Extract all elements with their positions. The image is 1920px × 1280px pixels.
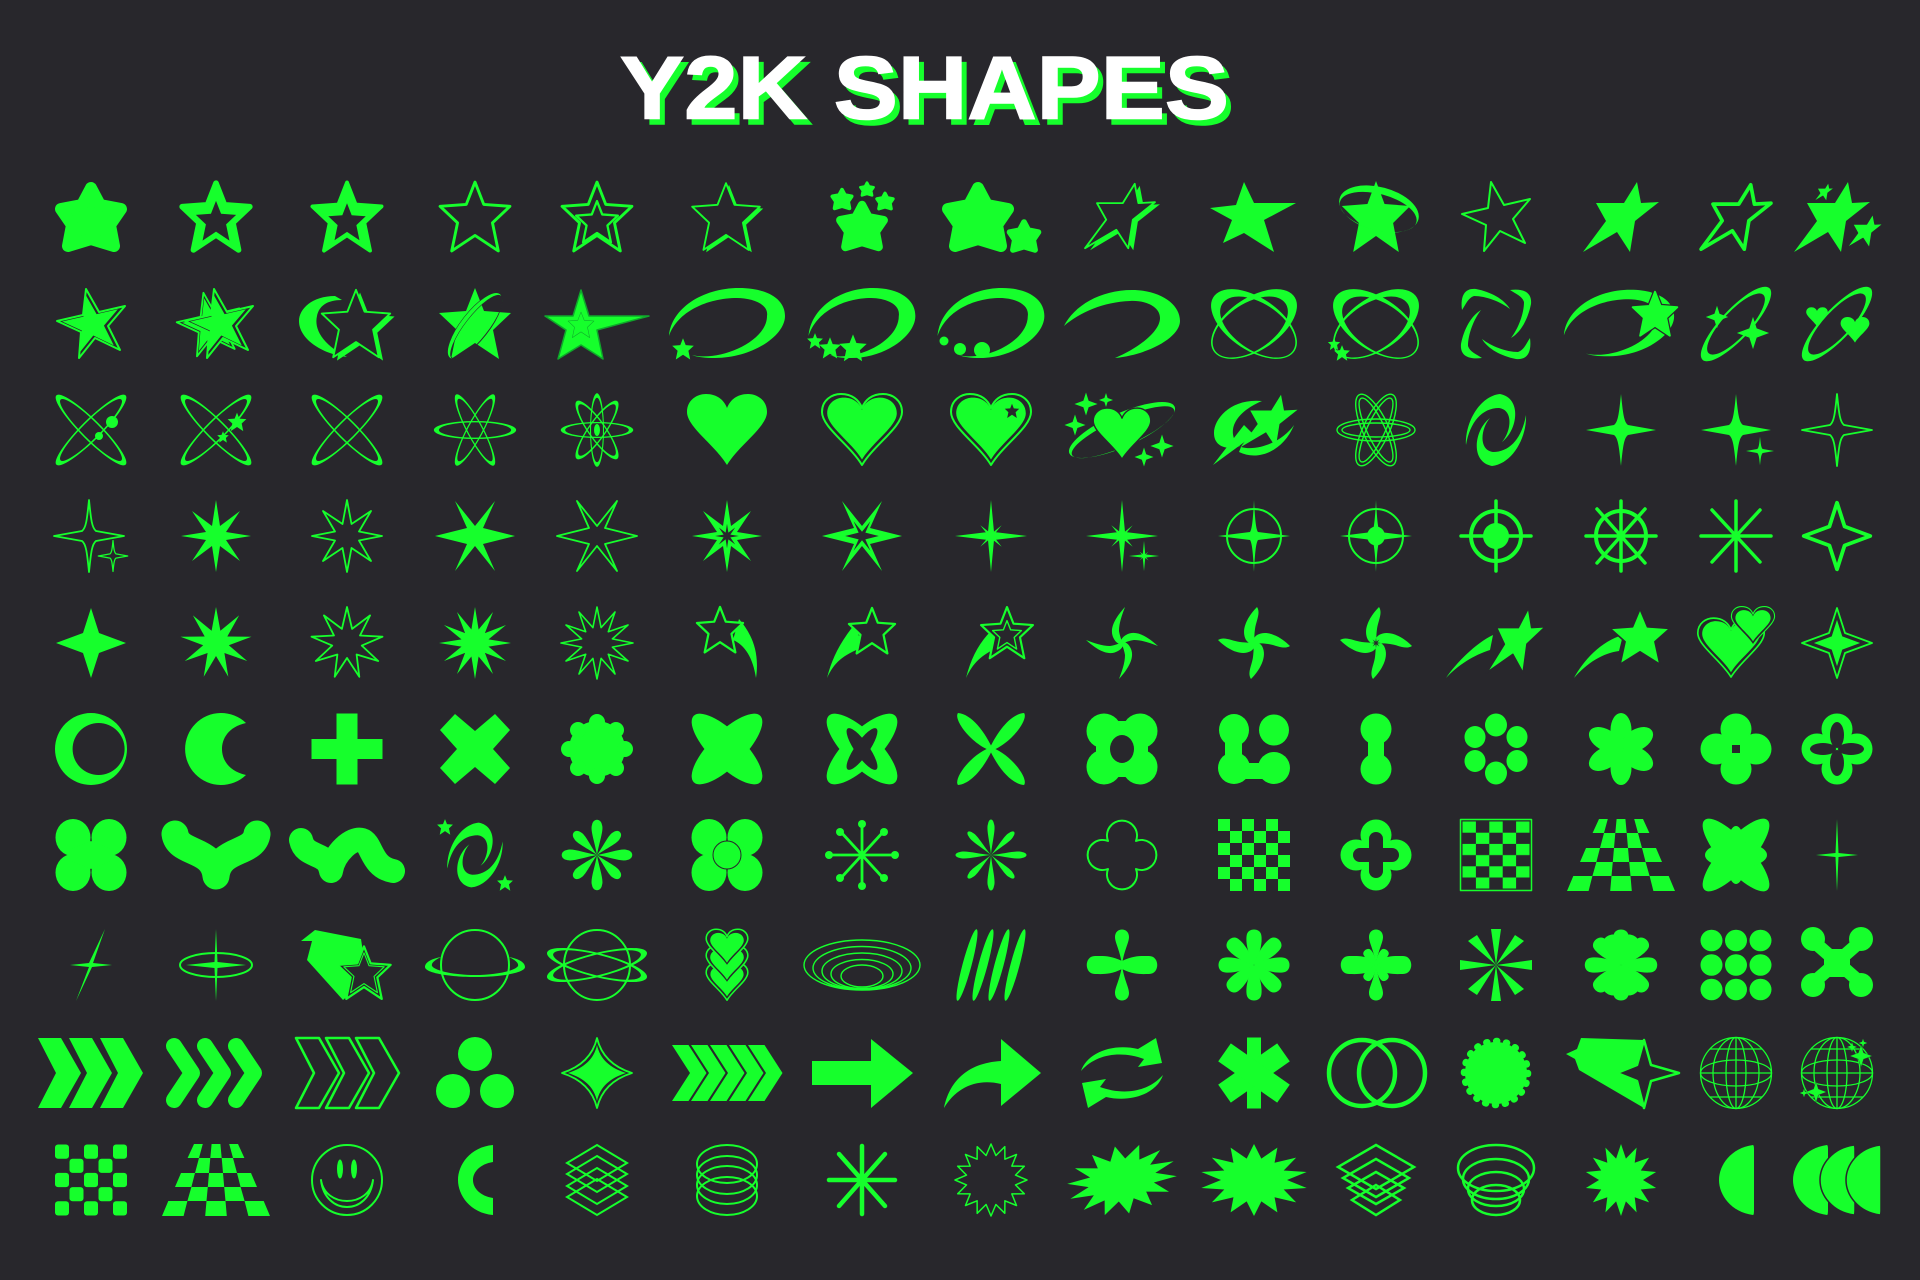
- icon: clover with centre circle: [692, 819, 762, 891]
- icon: shrinking diamonds: [1338, 1145, 1414, 1215]
- icon: slanted star with outline: [57, 289, 125, 358]
- icon: X blob with bulbs: [1801, 927, 1873, 997]
- icon: wavy blob: [561, 714, 633, 784]
- icon: fat eight petal flower: [1585, 930, 1657, 1000]
- icon: slanted shooting star: [1446, 608, 1546, 678]
- icon: heart with outline and star: [951, 394, 1031, 465]
- icon: thick quatrefoil plus: [1340, 820, 1412, 890]
- title: Y2K SHAPES: [625, 43, 1234, 143]
- icon: eight point star: [181, 500, 251, 572]
- icon: planet with crossing rings: [544, 930, 650, 1000]
- icon: planet outline: [425, 930, 525, 1000]
- icon: sharp solid star: [1210, 182, 1296, 252]
- icon: two hearts: [1698, 607, 1775, 677]
- icon: wheel: [1586, 501, 1656, 571]
- icon: wire globe with sparkles: [1800, 1038, 1872, 1108]
- icon: teardrop flower: [562, 820, 632, 890]
- icon: orbit with star: [669, 288, 785, 360]
- icon: six point star with centre: [822, 501, 902, 571]
- icon: spiky star: [1586, 1144, 1656, 1216]
- icon: blob square with hole: [1086, 714, 1158, 784]
- icon: rounded checkerboard: [55, 1144, 127, 1216]
- icon: nine point star: [180, 607, 252, 677]
- icon: circle with sparkle and dot: [1340, 500, 1412, 572]
- icon: crescent with star: [1564, 290, 1677, 356]
- icon: thin sparkle: [1816, 819, 1858, 891]
- icon: cross flower with small petals: [1341, 930, 1411, 1000]
- icon: slanted thick star outline: [1701, 185, 1771, 249]
- icon: four blade swirl: [1461, 289, 1531, 359]
- icon: dotted asterisk: [825, 820, 899, 890]
- icon: cross flower: [1087, 930, 1157, 1000]
- icon: star with orbit: [1334, 177, 1424, 252]
- icon: nested star outline: [562, 182, 632, 251]
- icon: fat X with hole: [817, 704, 907, 794]
- icon: comic burst tilted: [1062, 1135, 1182, 1225]
- icon: double slanted star: [177, 289, 253, 358]
- icon: stacked hearts: [706, 929, 748, 1000]
- title: Y2K SHAPES: [620, 38, 1229, 138]
- icon: ring: [55, 713, 127, 785]
- icon: V blob: [175, 834, 257, 876]
- icon: circle with sparkle: [1218, 500, 1290, 572]
- icon: thick sparkle outline: [1804, 503, 1870, 569]
- icon: rounded solid star: [61, 188, 121, 246]
- icon: perspective checker rounded: [162, 1144, 270, 1216]
- icon: orbit with three stars: [807, 288, 915, 361]
- icon: slanted star with small stars: [1794, 182, 1884, 252]
- icon: outlined four point star: [1802, 608, 1872, 678]
- icon: sparkle: [1586, 394, 1656, 466]
- icon: star with three small stars: [832, 183, 893, 247]
- icon: shooting star outline right tail: [697, 607, 757, 678]
- icon: thin X: [957, 713, 1025, 785]
- icon: glint: [955, 500, 1027, 572]
- icon: atom X with dots: [49, 388, 133, 472]
- icon: tunnel ellipses: [804, 940, 920, 990]
- icon: curved arrow: [944, 1039, 1041, 1108]
- icon: straight arrow: [812, 1039, 913, 1108]
- icon: shrinking rings: [1458, 1145, 1534, 1215]
- icon: blob letter shape: [1218, 714, 1290, 784]
- icon: atom with ring: [434, 391, 516, 469]
- icon: line asterisk: [1701, 501, 1771, 571]
- icon: heart with orbit and sparkles: [1063, 391, 1181, 469]
- icon: sparkle outline: [1802, 394, 1872, 466]
- icon: outline triple chevron: [296, 1038, 399, 1108]
- icon: six point star outline: [557, 501, 637, 571]
- icon: thick pinwheel: [1218, 607, 1290, 679]
- icon: crescent: [185, 713, 246, 785]
- icon: star outline: [440, 182, 510, 251]
- icon: fat X: [682, 704, 772, 794]
- icon: stacked diamonds: [567, 1145, 627, 1215]
- icon: slanted thin star outline: [1462, 182, 1530, 251]
- icon: crossing orbits: [1196, 277, 1312, 371]
- icon: W blob: [301, 840, 393, 871]
- icon: six petal flower: [1585, 713, 1657, 785]
- icon: nine point star outline: [312, 607, 382, 677]
- icon: atom with nucleus: [561, 393, 633, 467]
- icon: three half discs: [1793, 1145, 1881, 1215]
- icon: galaxy with stars: [437, 819, 513, 891]
- icon: sparkle with small sparkle: [1701, 394, 1774, 466]
- icon: quatrefoil solid: [1700, 714, 1772, 784]
- icon: plus: [312, 714, 382, 784]
- icon: star with hole: [312, 182, 382, 251]
- icon: long armed star: [545, 290, 649, 359]
- icon: slanted stripes: [953, 928, 1029, 1002]
- icon: glint with small glint: [1086, 500, 1159, 572]
- icon: thin petal asterisk: [956, 820, 1026, 890]
- icon: thick pinwheel with star: [1340, 607, 1412, 679]
- icon: orbit with dots: [938, 288, 1044, 358]
- icon: solid heart: [687, 394, 767, 465]
- icon: heart with outline: [822, 394, 902, 465]
- icon: refresh arrows: [1081, 1038, 1163, 1108]
- icon: ring of dots: [1464, 714, 1528, 784]
- icon: star outline with shadow: [692, 183, 763, 252]
- icon: eight point star outline: [312, 500, 382, 572]
- icon: block X: [440, 714, 510, 784]
- icon: atom X: [305, 388, 389, 472]
- icon: open orbit crescent: [1064, 290, 1180, 358]
- icon: big star and small star: [948, 188, 1038, 250]
- icon: shooting star outline left tail: [827, 608, 895, 678]
- icon: four lobe clover: [56, 819, 126, 891]
- icon: thin pinwheel: [1086, 607, 1158, 679]
- icon: smiley: [312, 1145, 382, 1215]
- icon: twelve point star outline: [561, 607, 633, 679]
- icon: dumbbell blob: [1360, 714, 1392, 784]
- icon: crossing orbits with stars: [1318, 277, 1434, 371]
- icon: wire globe: [1700, 1038, 1772, 1108]
- icon: framed checkerboard: [1460, 820, 1532, 890]
- icon: interlocked rings: [1329, 1040, 1425, 1106]
- icon: star with solid shadow: [301, 930, 391, 1000]
- icon: six point star: [435, 501, 515, 571]
- icon: comic burst wide: [1201, 1144, 1307, 1216]
- icon: star outline with crescent: [299, 290, 395, 361]
- icon: perspective checker: [1567, 819, 1675, 891]
- icon: block asterisk: [1218, 1038, 1290, 1108]
- icon: rounded triple chevron: [174, 1046, 254, 1100]
- icon: three dots: [436, 1037, 514, 1108]
- icon: thick asterisk: [829, 1146, 895, 1214]
- icon: twelve point star: [439, 607, 511, 679]
- icon: shooting star nested outline: [966, 607, 1033, 678]
- icon: half crescent: [458, 1145, 493, 1215]
- icon: quatrefoil thick outline: [1802, 714, 1872, 784]
- icon: stacked rings: [697, 1145, 757, 1215]
- icon: solid shape with sparkle: [1566, 1038, 1679, 1108]
- icon: sparkle outlines: [54, 500, 128, 572]
- icon: wedge burst: [1460, 929, 1532, 1001]
- icon: rounded four point star: [562, 1038, 632, 1108]
- icon: nine dots: [1700, 930, 1772, 1000]
- icon: tilted orbit with sparkles: [1692, 278, 1780, 370]
- icon: galaxy swirl: [1466, 394, 1526, 466]
- icon: half disc: [1719, 1145, 1754, 1215]
- icon: bolt sparkle: [70, 929, 112, 1001]
- icon: quatrefoil outline: [1088, 821, 1156, 889]
- icon: target: [1461, 501, 1531, 571]
- icon: tilted orbit with hearts: [1793, 278, 1881, 370]
- icon: crescent star comet: [1213, 395, 1298, 465]
- icon: blob asterisk: [1693, 810, 1779, 900]
- icon: banded chevron arrow: [672, 1045, 782, 1101]
- icon: starburst outline: [955, 1144, 1027, 1216]
- icon: eight point star with centre: [692, 500, 762, 572]
- icon: triple chevron: [38, 1038, 143, 1108]
- icon: slanted solid star: [1583, 182, 1659, 252]
- icon: slanted star outline with shadow: [1085, 184, 1160, 250]
- icon: eight petal flower: [1218, 930, 1290, 1000]
- icon: solid star with orbit: [439, 285, 511, 367]
- icon: atom X with stars: [174, 388, 258, 472]
- icon: thick star outline: [182, 183, 250, 250]
- icon: scalloped badge: [1464, 1041, 1528, 1105]
- icon: outlined atom: [1337, 389, 1415, 471]
- icon: checkerboard: [1218, 819, 1290, 891]
- icon: sharp shooting star: [1574, 609, 1670, 678]
- icon: ellipse with sparkle: [180, 929, 252, 1001]
- icon: solid four point star: [56, 608, 126, 678]
